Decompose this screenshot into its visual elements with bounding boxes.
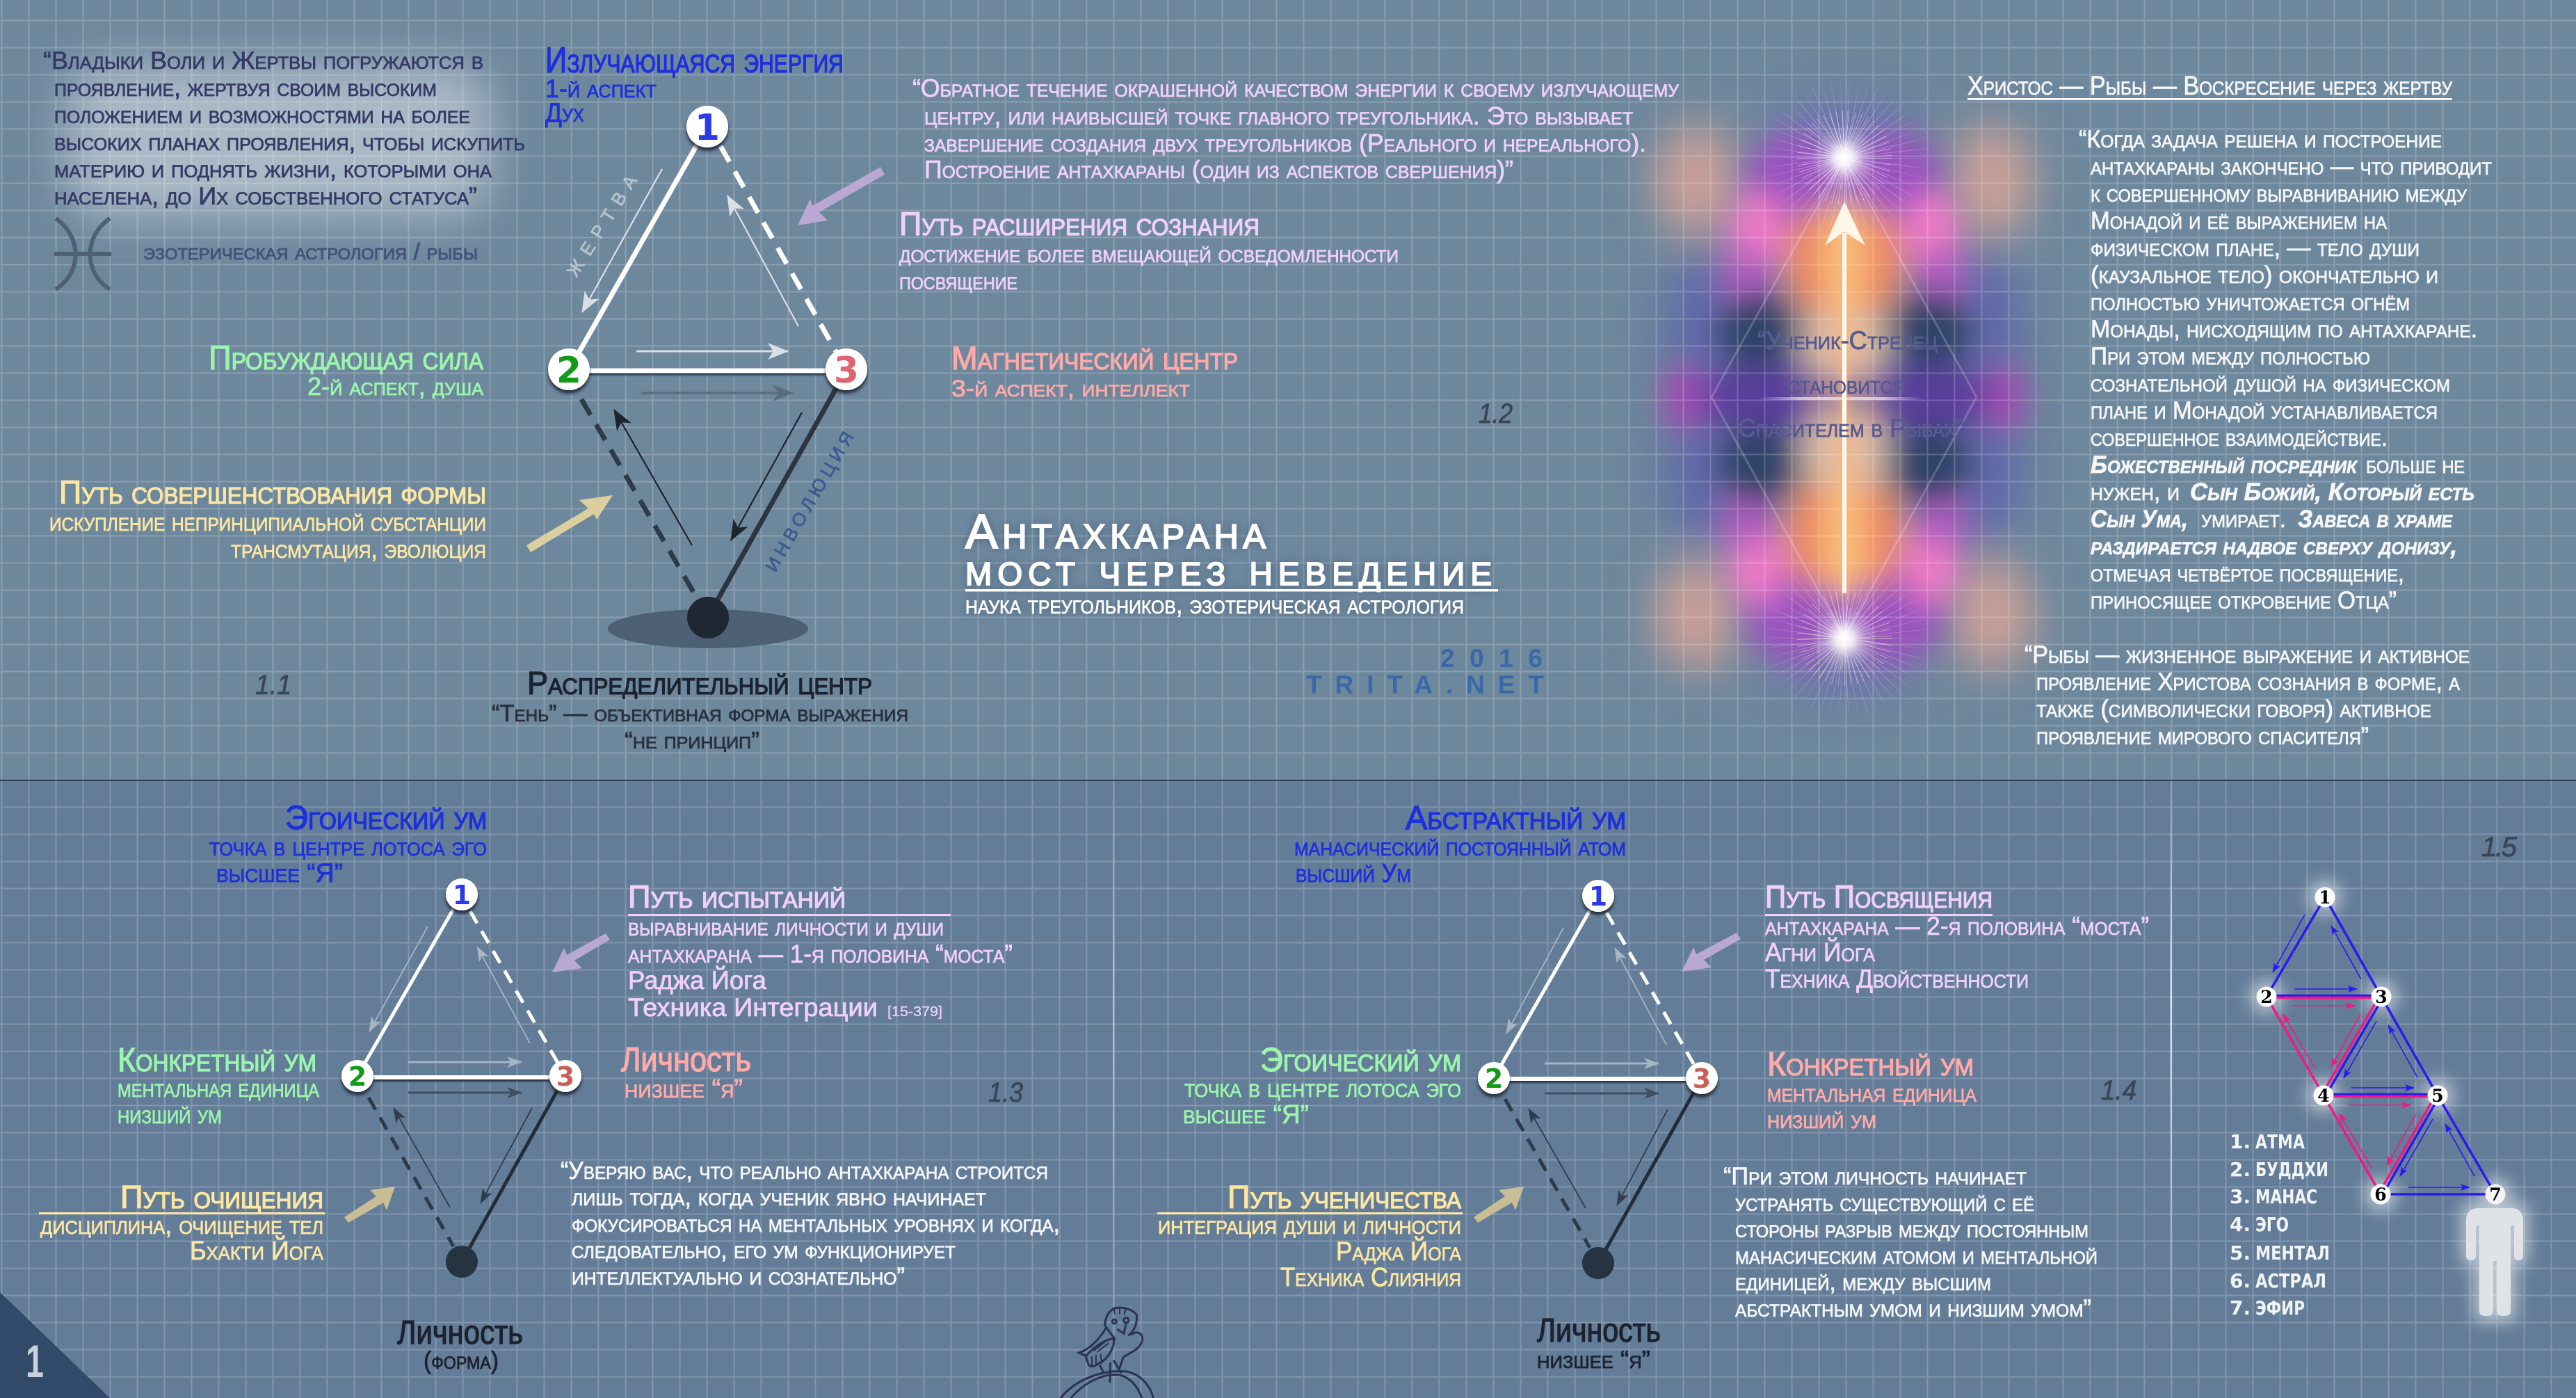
label: distribution centre <box>492 665 908 754</box>
node 2 <box>548 348 590 392</box>
quote: top left: “Владыки Воли и Жертвы погружаются в <box>43 47 483 74</box>
quote: Pisces: “Рыбы — жизненное выражение и активное <box>2024 641 2470 668</box>
node 1: 1 <box>1589 881 1607 912</box>
label: path of trials: Раджа Йога <box>628 965 766 995</box>
label: path of purification: Бхакти Йога <box>190 1235 323 1266</box>
quote: Christ text: Монады, нисходящим по антахкаране. <box>2091 316 2477 343</box>
legend: planes: 2. <box>2230 1158 2251 1181</box>
quote: top left: положением и возможностями на более <box>54 102 470 129</box>
label: magnetic centre: Магнетический центр <box>951 339 1238 376</box>
vertical divider left <box>1113 780 1114 1398</box>
triangle edges <box>357 894 565 1262</box>
quote: antahkarana is built <box>561 1157 1060 1290</box>
label: path of expansion of consciousness <box>899 205 1399 295</box>
large lavender arrow <box>1682 933 1741 972</box>
quote: Christ text: Сын Божий, Который есть <box>2190 479 2474 506</box>
year and site: TRITA.NET <box>1306 670 1544 699</box>
quote: top left: высоких планах проявления, чтобы искупить <box>54 129 525 156</box>
label: personality lower self: Личность <box>1537 1312 1661 1349</box>
label: path of initiation <box>1765 879 2149 994</box>
background upper area <box>0 0 2576 780</box>
label: egoic mind: Эгоический ум <box>285 800 487 837</box>
large lavender arrow <box>798 167 885 225</box>
label: path of trials: выравнивание личности и души <box>628 913 944 941</box>
numbered nodes: 1 <box>2319 887 2331 908</box>
text inside diamond: Спасителем в Рыбах” <box>1738 414 1964 442</box>
diagram 1.4: triangle <box>1474 880 1741 1279</box>
label: path of discipleship: Техника Слияния <box>1280 1263 1461 1292</box>
label: path of trials: антахкарана — 1-я половина “моста” <box>628 940 1013 968</box>
quote: personality closes gap <box>1723 1163 2098 1322</box>
label: personality lower self <box>1537 1312 1661 1374</box>
diagram 1.5: chain of triangles <box>2250 881 2528 1321</box>
label: path of discipleship: интеграция души и личности <box>1158 1211 1461 1240</box>
year and site: 2016 <box>1440 644 1543 673</box>
chain edges <box>2267 897 2495 1196</box>
quote: Christ text: нужен, и <box>2091 479 2180 506</box>
radiant diamond artwork <box>1654 106 2035 689</box>
numbered nodes: 7 <box>2489 1184 2502 1205</box>
flow arrows <box>1506 928 1668 1208</box>
quote: antahkarana is built: “Уверяю вас, что реально антахкарана строится <box>561 1157 1048 1184</box>
label: egoic mind green: точка в центре лотоса эго <box>1184 1074 1461 1103</box>
right heading: Христос — Рыбы — Воскресение через жертву <box>1967 72 2453 101</box>
rotated label: sacrifice: жертва <box>557 168 643 281</box>
label: concrete mind: низший ум <box>118 1100 222 1130</box>
node 3: 3 <box>556 1061 574 1092</box>
label: path of expansion of consciousness: Путь расширения сознания <box>899 205 1259 242</box>
quote: Christ text: больше не <box>2366 451 2465 479</box>
node 1: 1 <box>695 107 720 149</box>
label: concrete mind pink: ментальная единица <box>1767 1079 1977 1108</box>
legend: planes: 1. <box>2230 1130 2251 1153</box>
node 2 <box>1478 1062 1510 1094</box>
label: concrete mind: Конкретный ум <box>118 1042 316 1079</box>
label: personality form <box>397 1315 523 1374</box>
quote: antahkarana is built: интеллектуально и сознательно” <box>572 1263 905 1290</box>
label: path of expansion of consciousness: посвящение <box>899 266 1017 295</box>
legend: planes: 3. <box>2230 1185 2251 1208</box>
quote: Christ text: “Когда задача решена и построение <box>2079 126 2442 153</box>
node 1: 1 <box>453 880 471 910</box>
large tan arrow <box>1474 1187 1524 1223</box>
quote: Christ text <box>2079 126 2492 614</box>
flow arrows <box>369 926 532 1207</box>
node 2 <box>341 1060 373 1092</box>
pink flow arrows <box>2283 1006 2416 1168</box>
label: path of initiation: антахкарана — 2-я половина “моста” <box>1765 912 2149 940</box>
label: path of discipleship <box>1157 1179 1463 1292</box>
quote: Christ text: сознательной душой на физическом <box>2091 370 2450 397</box>
legend: planes: ЭГО <box>2255 1213 2289 1236</box>
triangle edges <box>569 127 846 617</box>
numbered nodes: 2 <box>2260 987 2273 1007</box>
label: path of form perfection: искупление непринципиальной субстанции <box>49 508 486 537</box>
label: path of purification: дисциплина, очищение тел <box>40 1211 323 1240</box>
diagram number 1.3: 1.3 <box>988 1077 1023 1108</box>
node glows <box>2250 881 2528 1321</box>
quote: personality closes gap: единицей, между высшим <box>1735 1269 1991 1296</box>
label: path of trials <box>628 879 1013 1022</box>
label: path of form perfection <box>49 474 486 564</box>
quote: top left: населена, до Их собственного статуса” <box>54 183 477 210</box>
quote: reverse flow <box>912 74 1679 184</box>
label: awakening force: 2-й аспект, душа <box>307 372 483 401</box>
label: magnetic centre <box>951 339 1238 402</box>
label: path of trials: Техника Интеграции <box>628 993 878 1022</box>
quote: Christ text: антахкараны закончено — что приводит <box>2091 153 2492 180</box>
node 3 <box>826 348 867 392</box>
blue flow arrows <box>2273 915 2474 1187</box>
quote: personality closes gap: “При этом личность начинает <box>1723 1163 2027 1190</box>
legend: planes: 5. <box>2230 1242 2251 1264</box>
page corner <box>0 1292 110 1398</box>
quote: Christ text: Сын Ума, <box>2091 506 2188 533</box>
node 2: 2 <box>1485 1063 1503 1094</box>
quote: antahkarana is built: следовательно, его ум функционирует <box>572 1237 956 1264</box>
numbered nodes: 5 <box>2431 1086 2444 1106</box>
quote: Christ text: При этом между полностью <box>2091 343 2370 370</box>
legend: planes: АСТРАЛ <box>2255 1269 2326 1292</box>
label: path of initiation: Агни Йога <box>1765 936 1875 967</box>
node 3 <box>549 1060 581 1092</box>
diagram 1.3: triangle <box>341 878 610 1278</box>
quote: Pisces: проявление Христова сознания в форме, а <box>2036 668 2460 696</box>
node 3: 3 <box>834 350 859 392</box>
label: egoic mind green <box>1183 1042 1461 1130</box>
quote: reverse flow: центру, или наивысшей точке главного треугольника. Это вызывает <box>924 102 1633 130</box>
quote: personality closes gap: устранять существующий с её <box>1735 1189 2034 1216</box>
label: path of expansion of consciousness: достижение более вмещающей осведомленности <box>899 239 1399 268</box>
legend: planes: МАНАС <box>2255 1185 2317 1208</box>
label: personality form: (форма) <box>424 1346 499 1374</box>
diagram number 1.1: 1.1 <box>255 670 291 700</box>
quote: Christ text: Завеса в храме <box>2298 506 2453 533</box>
main title: Антахкарана <box>965 504 1266 559</box>
bottom node <box>687 597 729 638</box>
quote: Christ text: отмечая четвёртое посвящение, <box>2091 560 2404 587</box>
label: path of discipleship: Путь ученичества <box>1227 1179 1462 1215</box>
heading: radiating energy <box>545 40 844 128</box>
large tan arrow <box>344 1187 395 1223</box>
quote: Pisces: также (символически говоря) активное <box>2036 696 2431 723</box>
label: path of discipleship: Раджа Йога <box>1336 1235 1461 1267</box>
label: distribution centre: “не принцип” <box>625 728 759 754</box>
legend: planes <box>2230 1130 2330 1319</box>
label: personality form: Личность <box>397 1315 523 1351</box>
label: magnetic centre: 3-й аспект, интеллект <box>951 376 1190 402</box>
label: concrete mind pink <box>1767 1046 1977 1134</box>
label: distribution centre: Распределительный центр <box>527 665 872 701</box>
quote: personality closes gap: стороны разрыв между постоянным <box>1735 1216 2088 1243</box>
quote: Christ text: физическом плане, — тело души <box>2091 234 2420 262</box>
heading: radiating energy: Дух <box>545 98 584 128</box>
quote: Christ text: полностью уничтожается огнём <box>2091 289 2410 316</box>
label: path of trials: Путь испытаний <box>628 879 846 915</box>
quote: reverse flow: “Обратное течение окрашенной качеством энергии к своему излучающему <box>912 74 1679 102</box>
quote: Pisces: проявление мирового спасителя” <box>2036 723 2369 750</box>
legend: planes: ЭФИР <box>2255 1296 2305 1319</box>
label: path of form perfection: Путь совершенствования формы <box>59 474 486 511</box>
quote: Christ text: умирает. <box>2201 506 2286 533</box>
node 2: 2 <box>348 1061 367 1092</box>
label: path of purification: Путь очищения <box>120 1179 323 1215</box>
bottom node <box>446 1246 478 1278</box>
main title <box>965 504 1498 620</box>
node 1 <box>1582 880 1614 912</box>
label: concrete mind pink: низший ум <box>1767 1105 1876 1134</box>
icon: human figure <box>2466 1208 2523 1316</box>
label: concrete mind <box>118 1042 319 1130</box>
label: abstract mind <box>1294 800 1626 888</box>
bottom node <box>1582 1247 1614 1279</box>
quote glow patch <box>66 64 490 217</box>
icon: owl on a ring <box>1061 1308 1153 1398</box>
label: personality: Личность <box>621 1041 751 1079</box>
label: concrete mind pink: Конкретный ум <box>1767 1046 1974 1083</box>
label: awakening force <box>209 339 483 401</box>
label: path of trials: [15-379] <box>887 1004 942 1020</box>
quote: Christ text: совершенное взаимодействие. <box>2091 424 2388 451</box>
quote: Christ text: Монадой и её выражением на <box>2091 207 2387 234</box>
numbered nodes: 6 <box>2374 1184 2387 1205</box>
quote: reverse flow: Построение антахкараны (один из аспектов свершения)” <box>924 155 1513 184</box>
label: personality <box>621 1041 751 1104</box>
numbered nodes: 4 <box>2317 1086 2330 1106</box>
page corner: 1 <box>26 1335 44 1387</box>
text inside diamond <box>1738 326 1964 442</box>
node 1 <box>686 106 728 149</box>
heading: radiating energy: Излучающаяся энергия <box>545 40 844 81</box>
shadow ellipse <box>608 609 808 648</box>
legend: planes: 6. <box>2230 1269 2251 1292</box>
node 1 <box>446 878 478 910</box>
node 2: 2 <box>556 350 581 392</box>
diagram number 1.2: 1.2 <box>1479 399 1513 429</box>
quote: personality closes gap: манасическим атомом и ментальной <box>1735 1242 2098 1269</box>
rotated label: involution: инволюция <box>755 425 859 576</box>
quote: antahkarana is built: фокусироваться на ментальных уровнях и когда, <box>572 1210 1060 1237</box>
label: awakening force: Пробуждающая сила <box>209 339 483 377</box>
quote: Pisces <box>2024 641 2470 750</box>
label: egoic mind: точка в центре лотоса эго <box>209 833 487 862</box>
quote: Christ text: раздирается надвое сверху донизу, <box>2091 533 2457 560</box>
label: abstract mind: манасический постоянный атом <box>1294 833 1626 862</box>
quote: top left <box>43 47 525 210</box>
label: personality lower self: низшее “я” <box>1537 1345 1650 1374</box>
legend: planes: АТМА <box>2255 1130 2305 1153</box>
label: abstract mind: высший Ум <box>1296 859 1411 888</box>
label: egoic mind <box>209 800 487 888</box>
label: egoic mind green: высшее “Я” <box>1183 1100 1309 1130</box>
label: personality: низшее “я” <box>625 1075 743 1104</box>
legend: planes: 4. <box>2230 1213 2251 1236</box>
quote: Christ text: плане и Монадой устанавливается <box>2091 397 2438 424</box>
node 3 <box>1686 1062 1718 1094</box>
background lower area <box>0 780 2576 1398</box>
numbered nodes: 3 <box>2375 987 2388 1007</box>
label: path of purification <box>39 1179 325 1266</box>
text inside diamond: “Ученик-Стрелец <box>1757 326 1938 355</box>
quote: Christ text: приносящее откровение Отца” <box>2091 587 2397 614</box>
quote: personality closes gap: абстрактным умом и низшим умом” <box>1735 1295 2091 1322</box>
quote: Christ text: к совершенному выравниванию между <box>2091 180 2467 207</box>
legend: planes: БУДДХИ <box>2255 1158 2328 1181</box>
main title: мост через неведение <box>965 543 1492 595</box>
label: path of initiation: Путь Посвящения <box>1765 879 1993 915</box>
heading: radiating energy: 1-й аспект <box>545 74 657 103</box>
label: path of initiation: Техника Двойственности <box>1765 965 2029 994</box>
diagram 1.1: main triangle <box>526 106 885 648</box>
node 3: 3 <box>1693 1063 1711 1094</box>
quote: Christ text: (каузальное тело) окончательно и <box>2091 262 2438 289</box>
vertical divider right <box>2170 780 2172 1398</box>
triangle edges <box>1494 896 1702 1263</box>
main title: наука треугольников, эзотерическая астрология <box>965 590 1464 620</box>
source note: эзотерическая астрология / рыбы <box>143 239 478 264</box>
label: abstract mind: Абстрактный ум <box>1406 800 1626 837</box>
large lavender arrow <box>552 933 610 972</box>
label: egoic mind: высшее “Я” <box>216 859 343 888</box>
label: concrete mind: ментальная единица <box>118 1074 319 1103</box>
year and site <box>1306 644 1544 699</box>
legend: planes: МЕНТАЛ <box>2255 1242 2330 1264</box>
large tan arrow <box>526 495 613 552</box>
legend: planes: 7. <box>2230 1296 2251 1319</box>
quote: Christ text: Божественный посредник <box>2091 451 2358 479</box>
label: path of form perfection: трансмутация, эволюция <box>231 535 486 564</box>
icon: pisces symbol <box>54 218 111 289</box>
numbered nodes <box>2256 887 2505 1205</box>
text inside diamond: становится <box>1788 371 1905 399</box>
quote: antahkarana is built: лишь тогда, когда ученик явно начинает <box>572 1184 986 1211</box>
quote: top left: материю и поднять жизни, которыми она <box>54 156 492 183</box>
arrow in radiant diamond <box>1825 202 1865 593</box>
flow arrows <box>582 169 802 545</box>
diagram number 1.5: 1.5 <box>2481 832 2518 862</box>
label: egoic mind green: Эгоический ум <box>1260 1042 1461 1079</box>
quote: reverse flow: завершение создания двух треугольников (Реального и нереального). <box>924 129 1646 157</box>
label: distribution centre: “Тень” — объективная форма выражения <box>492 700 908 727</box>
diagram number 1.4: 1.4 <box>2101 1075 2136 1106</box>
quote: top left: проявление, жертвуя своим высоким <box>54 74 437 102</box>
